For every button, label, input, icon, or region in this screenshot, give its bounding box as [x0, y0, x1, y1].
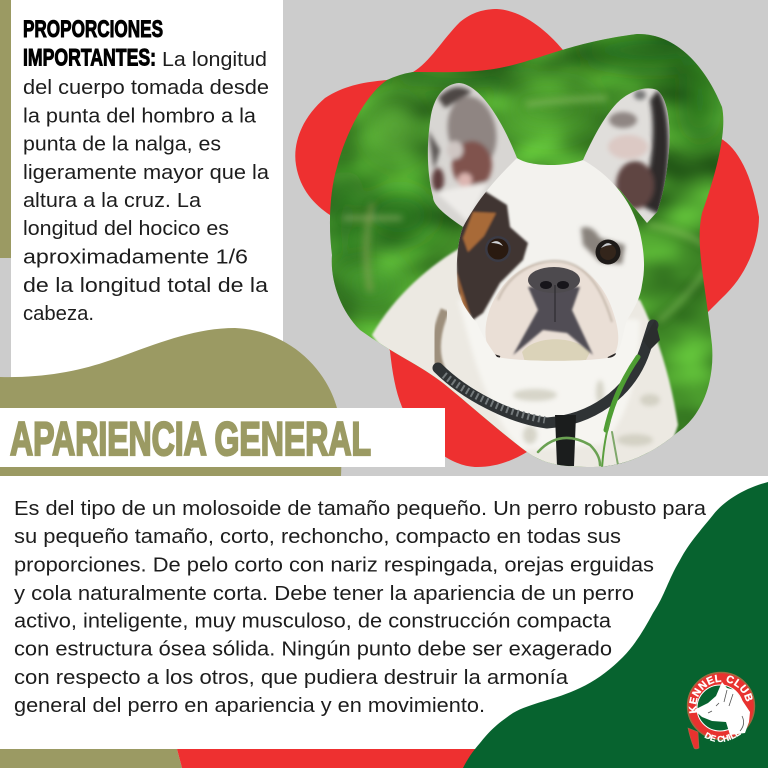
grass background: [320, 25, 730, 475]
logo green field: [697, 685, 743, 731]
red blob behind photo: [295, 9, 759, 467]
logo dog head: [694, 682, 750, 735]
body copy: la punta del hombro a la: [23, 104, 257, 128]
logo: kennel club de chile: [686, 672, 756, 750]
bottom red bar: [177, 749, 480, 768]
text block: apariencia general description: Es del tipo de un molosoide de tamaño pequeño. Un perro robusto para: [14, 497, 707, 520]
text block: apariencia general description: y cola naturalmente corta. Debe tener la apariencia de un perro: [14, 582, 634, 605]
muzzle: [485, 262, 618, 363]
body copy: cabeza.: [23, 302, 94, 325]
text block: proporciones importantes: [23, 16, 270, 325]
logo text bottom: DE CHILE: [704, 732, 742, 742]
bottom olive bar: [0, 749, 182, 768]
right ear: [583, 88, 670, 223]
olive wave shape: [0, 328, 341, 476]
dog head: [456, 158, 644, 363]
body copy: La longitud: [162, 48, 267, 71]
bold lead-in: PROPORCIONES: [23, 16, 163, 43]
body copy: de la longitud total de la: [23, 274, 269, 297]
nose: [528, 267, 580, 322]
logo dog details: [708, 690, 744, 731]
left eye: [485, 236, 511, 262]
photo: french bulldog on grass: [320, 25, 730, 480]
grey background: [0, 0, 768, 476]
right eye: [596, 240, 620, 264]
grass blades in front: [538, 357, 638, 468]
text block: apariencia general description: su pequeño tamaño, corto, rechoncho, compacto en todas sus: [14, 525, 621, 548]
left eye patch: [456, 190, 528, 320]
logo ring: [688, 672, 754, 740]
green corner wave: [463, 482, 768, 768]
text block: apariencia general description: [14, 497, 707, 717]
dark muzzle marking: [513, 287, 593, 355]
text block: apariencia general description: general del perro en apariencia y en movimiento.: [14, 694, 485, 717]
dog body: [372, 245, 678, 480]
body copy: longitud del hocico es: [23, 217, 229, 240]
body copy: [23, 48, 270, 325]
body copy: altura a la cruz. La: [23, 189, 202, 212]
text block: apariencia general description: con estructura ósea sólida. Ningún punto debe ser exagerado: [14, 638, 612, 660]
text block: apariencia general description: proporciones. De pelo corto con nariz respingada, orejas erguidas: [14, 554, 654, 576]
text block: apariencia general description: con respecto a los otros, que pudiera destruir la armonía: [14, 666, 569, 689]
logo tassel: [688, 728, 699, 749]
left ear: [428, 83, 517, 227]
logo text top: KENNEL CLUB: [688, 674, 753, 714]
body copy: del cuerpo tomada desde: [23, 76, 269, 99]
right eye shading: [581, 227, 625, 264]
olive strip left: [0, 0, 11, 258]
bold lead-in: [23, 16, 163, 72]
lip marks: [488, 353, 616, 358]
title: APARIENCIA GENERAL: [10, 412, 371, 465]
text block: apariencia general description: activo, inteligente, muy musculoso, de construcción compacta: [14, 610, 612, 632]
banner background: [0, 408, 445, 467]
chin: [522, 339, 590, 362]
title banner: [0, 408, 445, 467]
body copy: aproximadamente 1/6: [23, 246, 248, 268]
body copy: ligeramente mayor que la: [23, 161, 270, 184]
panel: proportions background: [11, 0, 283, 380]
harness: [436, 310, 660, 466]
bold lead-in: IMPORTANTES:: [23, 44, 156, 72]
white lower background: [0, 476, 768, 768]
body copy: punta de la nalga, es: [23, 132, 221, 156]
